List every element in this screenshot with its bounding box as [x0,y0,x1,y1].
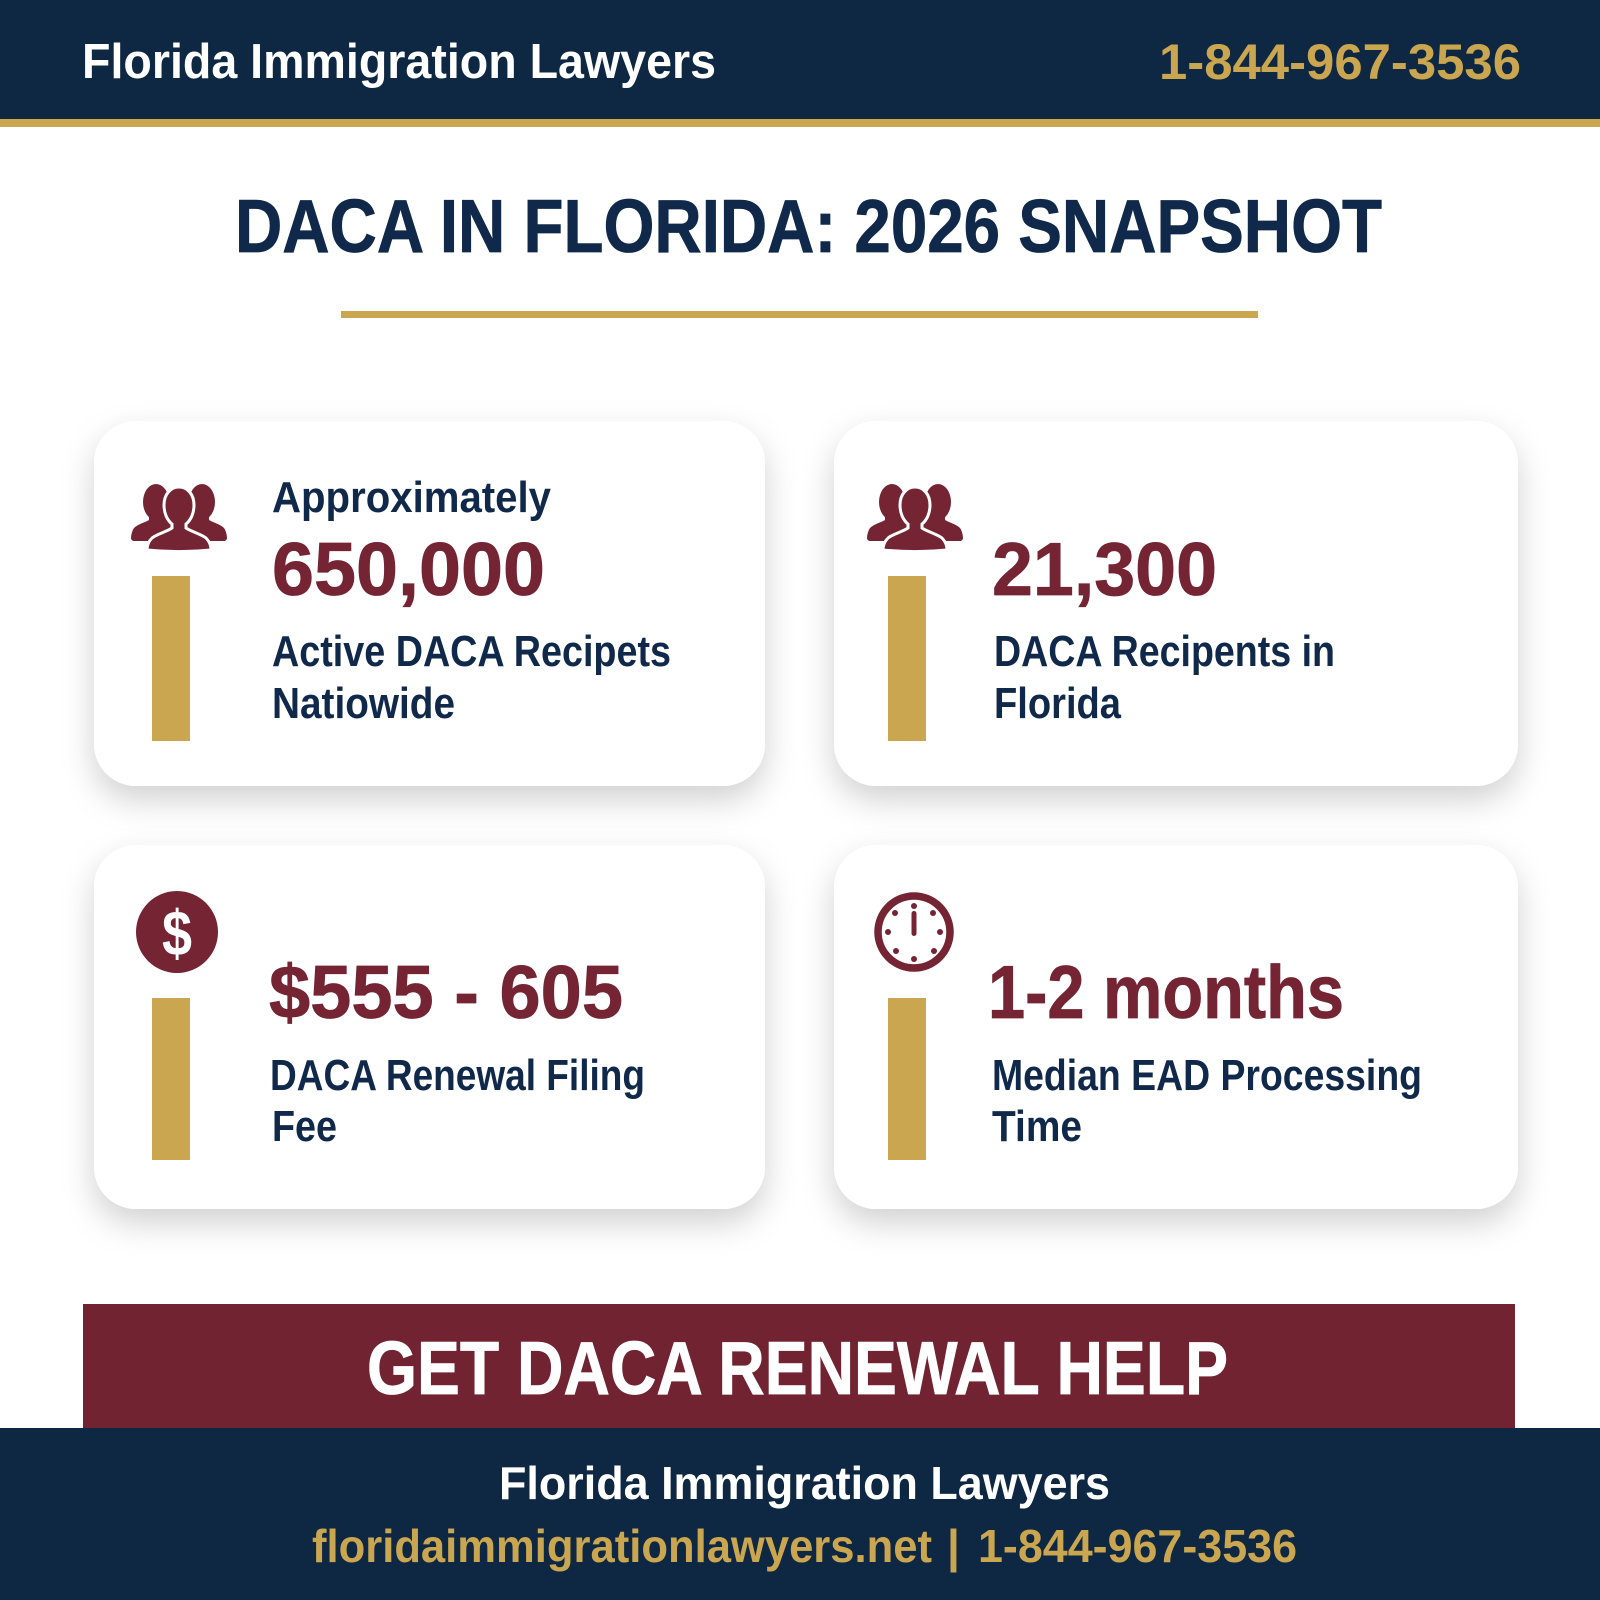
footer contact line: 1-844-967-3536 [978,1520,1297,1572]
icon: dollar coin: $ [162,897,192,969]
footer contact line: floridaimmigrationlawyers.net [312,1520,932,1572]
gold bar [888,576,926,741]
panel: EAD processing time [834,845,1518,1209]
statistic: $555 - 605 [269,950,623,1034]
call to action banner: GET DACA RENEWAL HELP [367,1326,1228,1410]
title underline [341,311,1258,318]
panel: recipients in Florida [834,421,1518,786]
description: Natiowide [272,679,455,728]
footer contact line: | [947,1520,960,1572]
title: DACA IN FLORIDA: 2026 SNAPSHOT [235,184,1382,268]
call to action banner [83,1304,1515,1428]
header firm name: Florida Immigration Lawyers [82,35,716,89]
description: Active DACA Recipets [272,627,671,676]
description [270,1051,645,1151]
lead-in text: Approximately [272,473,551,522]
header bar [0,0,1600,127]
icon: people group [867,484,963,552]
gold bar [152,576,190,741]
panel: active recipients nationwide [94,421,765,786]
footer [0,1428,1600,1600]
panel: renewal filing fee [94,845,765,1209]
statistic: 21,300 [992,527,1217,611]
gold bar [152,998,190,1160]
description: Florida [994,679,1121,728]
icon: dollar coin [136,891,218,973]
description: DACA Recipents in [994,627,1335,676]
icon: clock [878,896,950,968]
description: Fee [272,1102,337,1151]
description [272,627,671,728]
gold bar [888,998,926,1160]
description [992,1051,1422,1151]
description: DACA Renewal Filing [270,1051,645,1100]
footer firm name: Florida Immigration Lawyers [499,1457,1110,1509]
header phone number: 1-844-967-3536 [1159,34,1521,90]
icon: people group [131,484,227,552]
statistic: 1-2 months [988,950,1344,1034]
description: Time [992,1102,1082,1151]
description: Median EAD Processing [992,1051,1422,1100]
statistic: 650,000 [272,527,545,611]
description [994,627,1335,728]
footer contact line [312,1520,1297,1572]
